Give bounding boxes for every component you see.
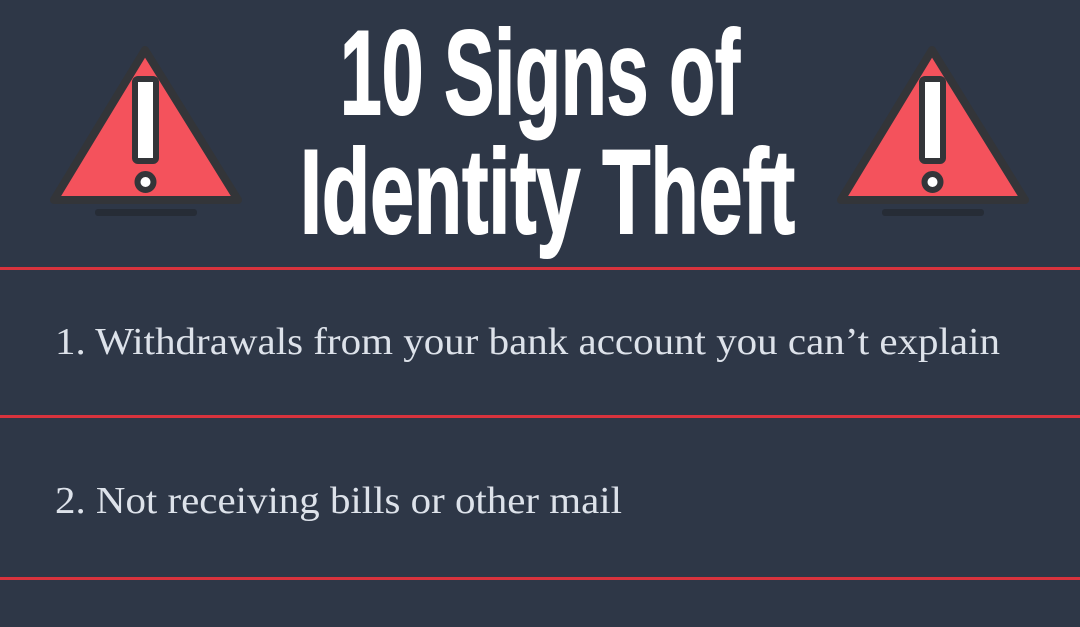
title: 10 Signs of bbox=[340, 6, 741, 140]
item 2 text: 2. Not receiving bills or other mail bbox=[55, 480, 622, 522]
item 1 text: 1. Withdrawals from your bank account you can’t explain bbox=[55, 321, 1000, 363]
title bbox=[300, 6, 795, 259]
title: Identity Theft bbox=[300, 125, 795, 259]
icon: left warning triangle bbox=[54, 50, 238, 216]
icon: right warning triangle bbox=[841, 50, 1025, 216]
dividers bbox=[0, 267, 1080, 270]
